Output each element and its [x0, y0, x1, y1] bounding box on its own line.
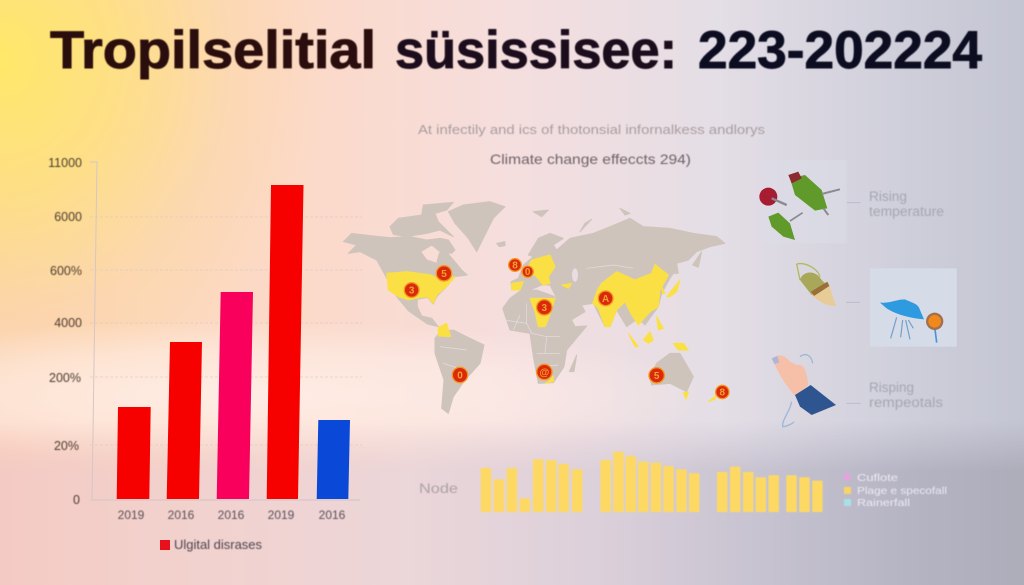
label: rising temperature: temperature — [869, 204, 944, 219]
map heading: Climate change effeccts 294) — [490, 151, 691, 167]
map markers: 0 — [525, 267, 531, 278]
y axis labels: 4000 — [54, 316, 82, 330]
icon: hand — [772, 355, 836, 427]
y axis labels: 20% — [54, 439, 79, 453]
bars — [117, 185, 350, 499]
map markers: 3 — [409, 286, 415, 297]
label: rising rainfall: Risping — [869, 380, 914, 395]
map markers: 8 — [512, 260, 518, 271]
world map — [343, 202, 729, 413]
y axis labels: 6000 — [54, 210, 82, 224]
x axis labels: 2019 — [268, 508, 295, 522]
y axis labels — [48, 156, 82, 507]
x axis labels: 2016 — [218, 508, 245, 522]
title: Tropilselitial — [50, 21, 376, 80]
small chart legend: Cuflote — [857, 472, 898, 484]
bar chart: diseases — [48, 156, 362, 552]
y axis labels: 11000 — [48, 156, 82, 170]
chart gridlines and axes — [90, 162, 362, 500]
label: rising rainfall: rempeotals — [869, 395, 943, 410]
title — [50, 21, 983, 80]
land masses — [343, 202, 725, 413]
small chart legend: Plage e specofall — [857, 485, 947, 497]
x axis labels: 2016 — [319, 508, 346, 522]
dash — [847, 201, 861, 204]
panel: rising temperature icon — [759, 160, 847, 243]
map markers: 5 — [441, 269, 447, 280]
label: rising temperature: Rising — [869, 189, 907, 204]
subtitle: At infectily and ics of thotonsial infornalkess andlorys — [418, 122, 766, 137]
y axis labels: 600% — [50, 264, 82, 278]
y axis labels: 200% — [49, 371, 81, 385]
map markers: @ — [539, 368, 549, 379]
highlighted countries — [387, 255, 717, 402]
small bar chart — [481, 452, 823, 512]
x axis labels: 2019 — [118, 508, 145, 522]
title: süsissisee: — [395, 21, 677, 80]
title: 223-202224 — [698, 21, 983, 80]
dash — [847, 402, 861, 405]
small chart legend — [844, 472, 947, 509]
dash — [846, 301, 860, 304]
map markers: 3 — [542, 303, 548, 314]
map markers: 8 — [720, 388, 726, 399]
y axis labels: 0 — [73, 493, 80, 507]
node label: Node — [419, 480, 458, 496]
x axis labels: 2016 — [168, 508, 195, 522]
map markers: A — [602, 294, 609, 305]
icon: seed pod — [797, 264, 836, 306]
panel: rainfall cloud icon — [870, 268, 957, 347]
label: rising rainfall — [869, 380, 943, 410]
map markers: 5 — [654, 371, 660, 382]
inland water and borders — [440, 265, 633, 370]
chart legend: Ulgital disrases — [174, 537, 262, 552]
map markers: 0 — [457, 371, 463, 382]
label: rising temperature — [869, 189, 944, 219]
small chart legend: Rainerfall — [857, 497, 910, 509]
background upper wash — [0, 0, 1024, 456]
map markers — [404, 259, 729, 399]
climate effects icons — [759, 160, 957, 427]
x axis labels — [118, 508, 346, 522]
